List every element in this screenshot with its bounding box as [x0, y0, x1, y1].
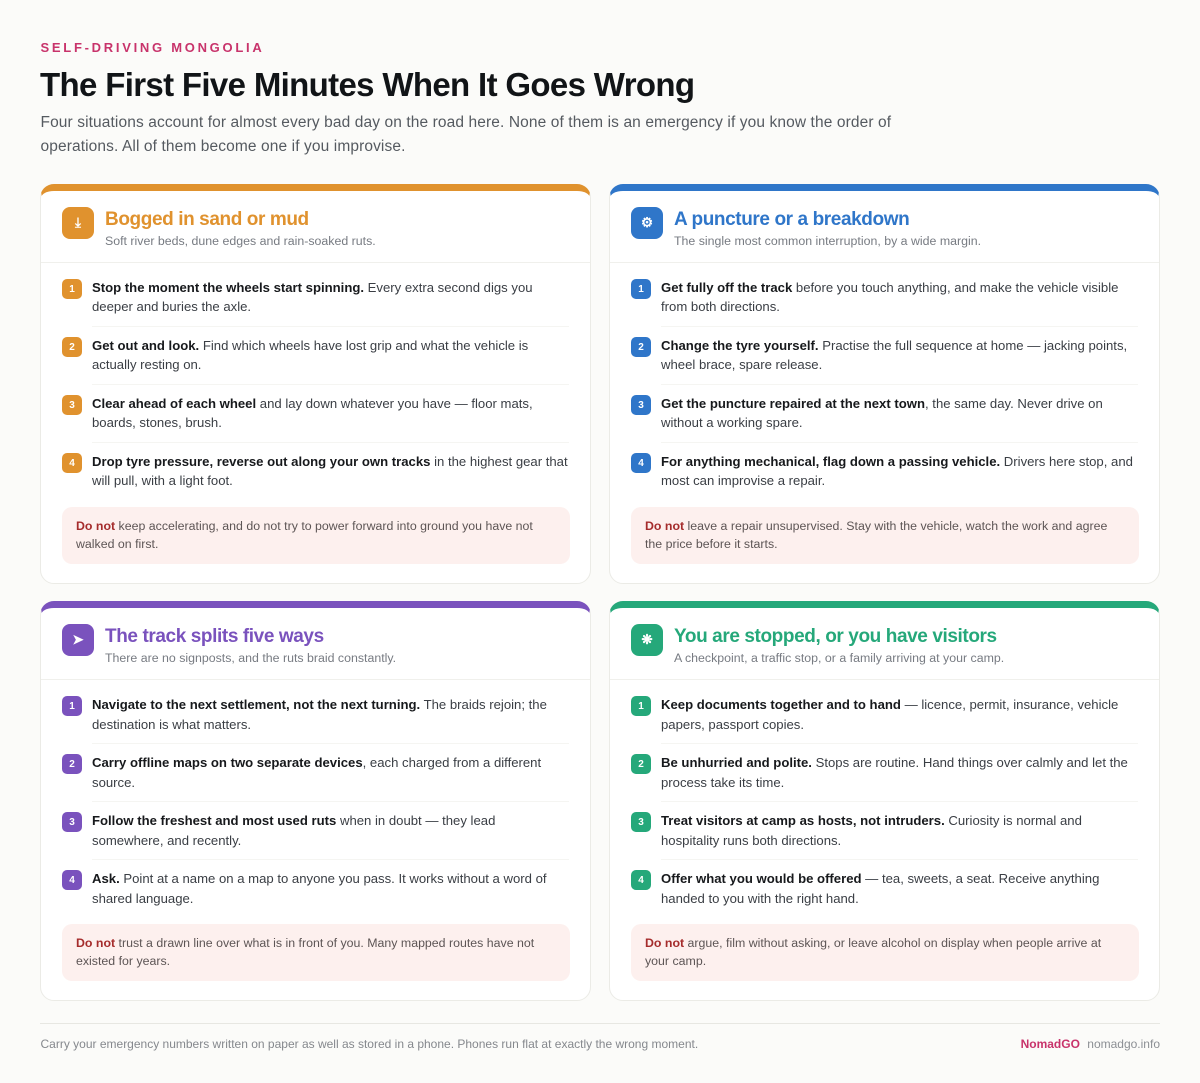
step 4: [62, 870, 547, 906]
step 2: Get out and look. Find which wheels have lost grip and what the vehicle is: [92, 338, 528, 353]
subheading: track splits: There are no signposts, and the ruts braid constantly.: [105, 651, 396, 665]
warning callout: Do not argue, film without asking, or leave alcohol on display when people arrive at: [645, 936, 1101, 950]
step 1: from both directions.: [661, 299, 780, 314]
icon: navigation arrow: ➤: [72, 632, 84, 647]
step 1: destination is what matters.: [92, 717, 251, 732]
step 2: [62, 337, 528, 372]
panel: bogged in sand or mud: [40, 184, 591, 584]
step 1: [62, 279, 533, 314]
step 4: [631, 453, 1133, 488]
icon: gear: ⚙: [641, 215, 653, 230]
icon: asterisk burst: ❋: [641, 632, 653, 647]
step 4: 4: [69, 458, 75, 469]
step 1: Stop the moment the wheels start spinning. Every extra second digs you: [92, 280, 533, 295]
intro text: Four situations account for almost every bad day on the road here. None of them is an emergency if you know the order of: [40, 114, 891, 131]
step 3: somewhere, and recently.: [92, 833, 241, 848]
step 3: 3: [638, 817, 644, 828]
step 1: [62, 696, 547, 732]
step 3: Follow the freshest and most used ruts when in doubt — they lead: [92, 813, 495, 828]
title: The First Five Minutes When It Goes Wrong: [40, 66, 694, 102]
intro text: operations. All of them become one if you improvise.: [40, 138, 406, 155]
step 4: 4: [69, 875, 75, 886]
step 3: 3: [69, 817, 75, 828]
heading: stopped: You are stopped, or you have visitors: [674, 626, 997, 647]
step 2: Be unhurried and polite. Stops are routine. Hand things over calmly and let the: [661, 755, 1128, 770]
step 4: [631, 870, 1099, 906]
step 4: handed to you with the right hand.: [661, 891, 859, 906]
step 3: Get the puncture repaired at the next town, the same day. Never drive on: [661, 396, 1103, 411]
step 2: wheel brace, spare release.: [661, 357, 822, 372]
warning callout: Do not keep accelerating, and do not try to power forward into ground you have not: [76, 519, 533, 533]
step 1: Get fully off the track before you touch anything, and make the vehicle visible: [661, 280, 1118, 295]
step 1: [631, 696, 1118, 732]
warning callout: [631, 924, 1139, 981]
warning callout: Do not leave a repair unsupervised. Stay with the vehicle, watch the work and agree: [645, 519, 1107, 533]
step 2: 2: [69, 759, 75, 770]
step 1: Keep documents together and to hand — licence, permit, insurance, vehicle: [661, 697, 1118, 712]
step 2: [62, 754, 542, 790]
eyebrow: SELF-DRIVING MONGOLIA: [40, 40, 264, 55]
intro text: [40, 114, 892, 155]
heading: bogged: Bogged in sand or mud: [105, 209, 309, 230]
step 1: 1: [69, 284, 75, 295]
panel: puncture or breakdown: [609, 184, 1160, 584]
footer note: Carry your emergency numbers written on paper as well as stored in a phone. Phones run flat at exactly the wrong moment.: [40, 1037, 698, 1051]
step 3: Treat visitors at camp as hosts, not intruders. Curiosity is normal and: [661, 813, 1082, 828]
step 2: Carry offline maps on two separate devices, each charged from a different: [92, 755, 541, 770]
subheading: puncture: The single most common interruption, by a wide margin.: [674, 234, 981, 248]
step 4: Drop tyre pressure, reverse out along your own tracks in the highest gear that: [92, 454, 568, 469]
warning callout: [62, 507, 570, 564]
warning callout: [62, 924, 570, 981]
step 2: 2: [69, 342, 75, 353]
subheading: stopped: A checkpoint, a traffic stop, or a family arriving at your camp.: [674, 651, 1004, 665]
panel: stopped or visitors: [609, 601, 1160, 1001]
step 1: Navigate to the next settlement, not the next turning. The braids rejoin; the: [92, 697, 547, 712]
step 3: [631, 812, 1082, 848]
step 3: [62, 395, 533, 430]
icon: down arrow to ground: ⤓: [75, 215, 81, 230]
step 3: [631, 395, 1103, 430]
step 3: boards, stones, brush.: [92, 415, 222, 430]
step 4: Ask. Point at a name on a map to anyone you pass. It works without a word of: [92, 871, 547, 886]
step 4: [62, 453, 568, 488]
icon: gear: [631, 207, 663, 239]
warning callout: existed for years.: [76, 954, 170, 968]
step 2: process take its time.: [661, 775, 784, 790]
icon: asterisk burst: [631, 624, 663, 656]
step 2: source.: [92, 775, 135, 790]
step 4: For anything mechanical, flag down a passing vehicle. Drivers here stop, and: [661, 454, 1133, 469]
warning callout: walked on first.: [76, 537, 158, 551]
step 1: 1: [638, 284, 644, 295]
warning callout: Do not trust a drawn line over what is in front of you. Many mapped routes have not: [76, 936, 534, 950]
step 2: Change the tyre yourself. Practise the full sequence at home — jacking points,: [661, 338, 1127, 353]
step 1: [631, 279, 1118, 314]
step 4: shared language.: [92, 891, 193, 906]
step 3: 3: [69, 400, 75, 411]
warning callout: your camp.: [645, 954, 706, 968]
step 2: [631, 754, 1128, 790]
step 2: actually resting on.: [92, 357, 201, 372]
step 1: deeper and buries the axle.: [92, 299, 251, 314]
step 4: 4: [638, 458, 644, 469]
step 3: 3: [638, 400, 644, 411]
heading: track splits: The track splits five ways: [105, 626, 324, 647]
step 2: 2: [638, 759, 644, 770]
footer brand: NomadGO nomadgo.info: [1021, 1037, 1160, 1051]
step 3: hospitality runs both directions.: [661, 833, 841, 848]
step 1: 1: [69, 701, 75, 712]
heading: puncture: A puncture or a breakdown: [674, 209, 909, 230]
step 3: without a working spare.: [661, 415, 803, 430]
subheading: bogged: Soft river beds, dune edges and rain-soaked ruts.: [105, 234, 376, 248]
step 2: [631, 337, 1127, 372]
icon: navigation arrow: [62, 624, 94, 656]
step 4: most can improvise a repair.: [661, 473, 825, 488]
step 3: [62, 812, 495, 848]
step 4: will pull, with a light foot.: [92, 473, 233, 488]
step 4: Offer what you would be offered — tea, sweets, a seat. Receive anything: [661, 871, 1099, 886]
step 2: 2: [638, 342, 644, 353]
warning callout: [631, 507, 1139, 564]
icon: down arrow to ground: [62, 207, 94, 239]
step 4: 4: [638, 875, 644, 886]
step 3: Clear ahead of each wheel and lay down whatever you have — floor mats,: [92, 396, 533, 411]
panel: track splits: [40, 601, 591, 1001]
step 1: papers, passport copies.: [661, 717, 804, 732]
step 1: 1: [638, 701, 644, 712]
warning callout: the price before it starts.: [645, 537, 778, 551]
